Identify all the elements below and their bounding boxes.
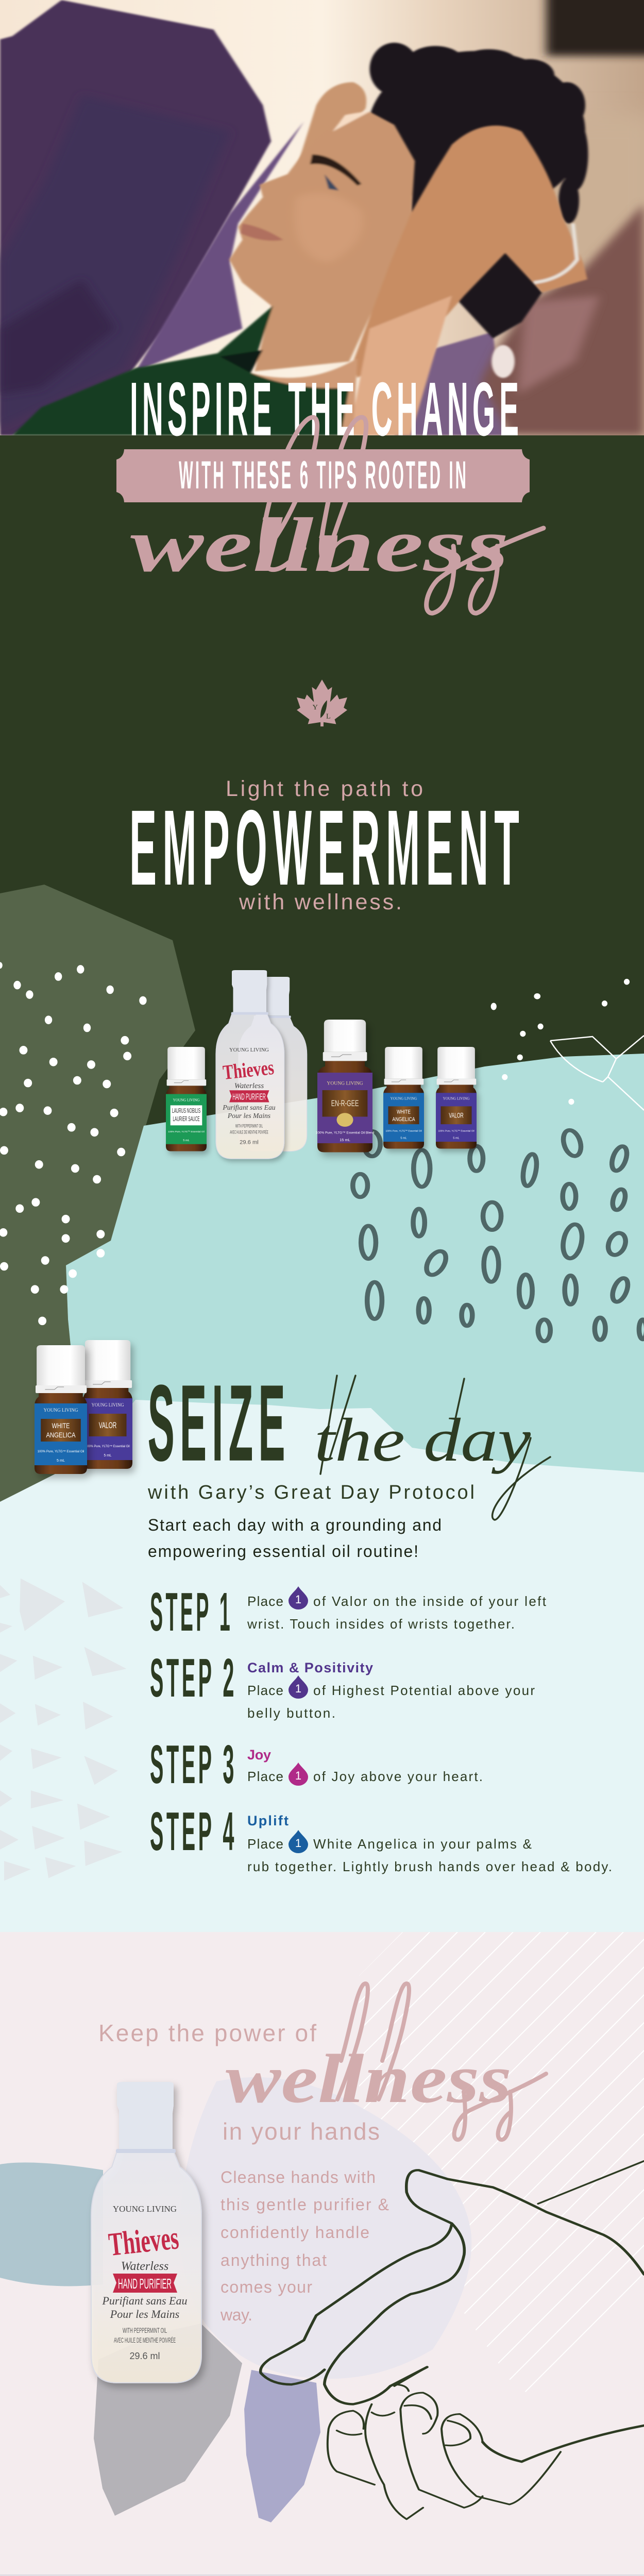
script heading: the day: the day <box>314 1405 531 1474</box>
product: Thieves hand purifier <box>91 2082 201 2383</box>
hero photo: relaxing woman on a purple sofa <box>0 0 644 435</box>
lilac background <box>0 2575 644 2576</box>
product: Thieves purifier front bottle: Pour les Mains <box>227 1112 270 1120</box>
script heading: the day <box>314 1376 550 1520</box>
product: White Angelica bottle, lower: 100% Pure, YLTG™ Essential Oil <box>38 1450 84 1453</box>
step 4: STEP 4 <box>150 1801 237 1862</box>
product: Valor bottle, lower <box>83 1340 132 1469</box>
panel: empowerment <box>0 776 644 1932</box>
step 1: Place <box>247 1594 283 1609</box>
text: cleanse hands: Cleanse hands with <box>221 2168 376 2187</box>
blue blob <box>0 2162 103 2286</box>
product: Valor bottle, lower: YOUNG LIVING <box>91 1402 124 1408</box>
product: Thieves purifier front bottle: HAND PURIFIER <box>232 1091 266 1101</box>
text: intro <box>148 1516 442 1561</box>
product: Valor bottle, lower: 100% Pure, YLTG™ Essential Oil <box>86 1445 130 1448</box>
product: En-R-Gee bottle: 15 mL <box>340 1138 350 1142</box>
icon: purple drop: 1 <box>295 1593 301 1606</box>
text: intro: empowering essential oil routine! <box>148 1542 418 1561</box>
product: Thieves purifier front bottle: YOUNG LIVING <box>229 1047 269 1053</box>
product: Thieves hand purifier: AVEC HUILE DE MENTHE POIVRÉE <box>114 2336 176 2344</box>
product: White Angelica bottle: 100% Pure, YLTG™ Essential Oil <box>385 1129 422 1132</box>
product: Thieves purifier front bottle: WITH PEPPERMINT OIL <box>235 1123 263 1128</box>
icon: magenta drop: 1 <box>295 1769 301 1782</box>
text: cleanse hands: anything that <box>221 2251 327 2269</box>
product: En-R-Gee bottle: EN-R-GEE <box>331 1098 359 1108</box>
script heading: wellness: wellness <box>130 502 509 588</box>
icon: blue drop <box>289 1830 308 1853</box>
step 4: Uplift <box>247 1813 289 1828</box>
product: Valor bottle: 5 mL <box>453 1137 460 1140</box>
step 3: Joy <box>247 1747 271 1762</box>
product: Laurus Nobilis bottle: LAURIER SAUCE <box>173 1115 200 1123</box>
droplet ring pattern <box>353 1129 644 1341</box>
product: Laurus Nobilis bottle: LAURUS NOBILIS <box>172 1107 200 1114</box>
product: Thieves hand purifier: Waterless <box>121 2260 168 2273</box>
panel: hero <box>0 0 644 726</box>
text: intro: Start each day with a grounding and <box>148 1516 442 1534</box>
product: Thieves hand purifier: Purifiant sans Eau <box>101 2294 188 2307</box>
pink background <box>0 1932 644 2575</box>
text: cleanse hands <box>220 2168 389 2324</box>
product: White Angelica bottle: YOUNG LIVING <box>391 1097 417 1101</box>
step 3: STEP 3 <box>150 1734 237 1795</box>
text: keep the power of: Keep the power of <box>98 2020 316 2046</box>
product: Valor bottle: VALOR <box>449 1111 464 1119</box>
step 4: Place <box>247 1836 283 1852</box>
product: White Angelica bottle, lower: ANGELICA <box>46 1431 76 1439</box>
banner: with these 6 tips rooted in <box>116 449 530 502</box>
product: White Angelica bottle, lower: 5 mL <box>57 1459 65 1463</box>
step 4: rub together. Lightly brush hands over head & body. <box>247 1859 612 1874</box>
icon: maple leaf logo: Y <box>312 704 318 711</box>
product: En-R-Gee bottle: YOUNG LIVING <box>327 1081 363 1087</box>
white dots pattern <box>0 962 630 1325</box>
subheading: protocol: with Gary’s Great Day Protocol <box>147 1482 474 1503</box>
product: Thieves hand purifier: Pour les Mains <box>110 2308 179 2320</box>
icon: maple leaf logo: L <box>326 713 331 720</box>
periwinkle blob <box>244 2370 320 2522</box>
lilac circle blob <box>180 2077 471 2379</box>
product: White Angelica bottle <box>383 1047 424 1149</box>
grey blob <box>94 2324 242 2516</box>
mint brush panel <box>0 1054 644 1546</box>
line art: open hands <box>261 2161 644 2519</box>
step 2: Calm & Positivity <box>247 1660 373 1675</box>
step 1 <box>150 1582 547 1642</box>
product: Thieves purifier front bottle: Thieves <box>222 1056 275 1084</box>
product: White Angelica bottle: ANGELICA <box>392 1116 415 1123</box>
step 1: STEP 1 <box>150 1582 233 1642</box>
product: Valor bottle: 100% Pure, YLTG™ Essential Oil <box>438 1129 474 1132</box>
product: Valor bottle, lower: VALOR <box>99 1420 116 1430</box>
product: Thieves purifier front bottle: Waterless <box>234 1082 264 1090</box>
step 2 <box>150 1648 535 1721</box>
icon: maple leaf logo <box>297 680 347 726</box>
step 2: STEP 2 <box>150 1648 237 1708</box>
product: Valor bottle: YOUNG LIVING <box>443 1097 469 1101</box>
text: cleanse hands: confidently handle <box>221 2223 369 2242</box>
product: Thieves hand purifier: WITH PEPPERMINT OIL <box>123 2326 167 2334</box>
product: Thieves hand purifier: YOUNG LIVING <box>113 2204 177 2214</box>
product: Laurus Nobilis bottle: YOUNG LIVING <box>173 1098 199 1102</box>
olive polygon background <box>0 885 195 1502</box>
product: Thieves purifier back bottle <box>239 977 307 1151</box>
icon: purple drop: 1 <box>295 1682 301 1695</box>
product: Laurus Nobilis bottle <box>166 1047 207 1151</box>
dark green page background <box>0 435 644 1074</box>
pale panel <box>0 1400 644 1932</box>
product: White Angelica bottle: WHITE <box>397 1109 411 1115</box>
script heading: wellness <box>226 1984 546 2140</box>
step 3: Place <box>247 1769 283 1784</box>
text: cleanse hands: comes your <box>221 2278 312 2296</box>
text: with wellness: with wellness. <box>239 890 402 914</box>
text: in your hands: in your hands <box>223 2118 380 2145</box>
step 2: of Highest Potential above your <box>313 1683 535 1698</box>
panel: seize the day: SEIZE <box>148 1363 291 1483</box>
product: Thieves purifier front bottle <box>216 970 284 1159</box>
pale triangle pattern <box>0 1579 127 1881</box>
icon: white leaf outline <box>550 1036 644 1110</box>
product: Valor bottle, lower: 5 mL <box>104 1454 112 1458</box>
product: Thieves hand purifier: Thieves <box>107 2219 180 2263</box>
script heading: wellness: wellness <box>226 2041 512 2117</box>
step 1: wrist. Touch insides of wrists together. <box>247 1616 515 1632</box>
product: Laurus Nobilis bottle: 100% Pure, YLTG™ Essential Oil <box>168 1130 205 1133</box>
step 2: Place <box>247 1683 283 1698</box>
product: Thieves purifier front bottle: 29.6 ml <box>240 1139 259 1145</box>
icon: magenta drop <box>289 1762 308 1786</box>
product: Thieves hand purifier: HAND PURIFIER <box>118 2276 172 2292</box>
diagonal white lines <box>359 1932 644 2392</box>
product: White Angelica bottle, lower <box>35 1345 87 1474</box>
product: White Angelica bottle: 5 mL <box>400 1137 407 1140</box>
text: light the path to: Light the path to <box>226 776 423 801</box>
icon: purple drop <box>289 1675 308 1699</box>
product: Thieves hand purifier: 29.6 ml <box>129 2351 160 2361</box>
product: White Angelica bottle, lower: WHITE <box>52 1421 70 1430</box>
panel: seize the day <box>0 1340 612 1881</box>
product: Valor bottle <box>436 1047 477 1149</box>
product: Thieves purifier front bottle: AVEC HUILE DE MENTHE POIVRÉE <box>230 1129 268 1134</box>
step 2: belly button. <box>247 1705 335 1721</box>
icon: purple drop <box>289 1586 308 1609</box>
product: Thieves purifier front bottle: Purifiant sans Eau <box>222 1104 276 1111</box>
panel: energize and uplift <box>0 2574 644 2576</box>
panel: wellness in your hands <box>0 1932 644 2575</box>
product: En-R-Gee bottle <box>316 1020 375 1152</box>
product: En-R-Gee bottle: 100% Pure, YLTG™ Essential Oil Blend <box>316 1131 375 1134</box>
script heading: wellness <box>130 417 544 613</box>
text: cleanse hands: way. <box>220 2306 252 2324</box>
step 1: of Valor on the inside of your left <box>313 1594 547 1609</box>
text: cleanse hands: this gentle purifier & <box>221 2195 389 2214</box>
product: Laurus Nobilis bottle: 5 mL <box>183 1139 190 1142</box>
product: White Angelica bottle, lower: YOUNG LIVING <box>44 1408 78 1413</box>
icon: blue drop: 1 <box>295 1837 301 1850</box>
step 3: of Joy above your heart. <box>313 1769 483 1784</box>
step 4 <box>150 1801 612 1874</box>
step 4: White Angelica in your palms & <box>313 1836 532 1852</box>
